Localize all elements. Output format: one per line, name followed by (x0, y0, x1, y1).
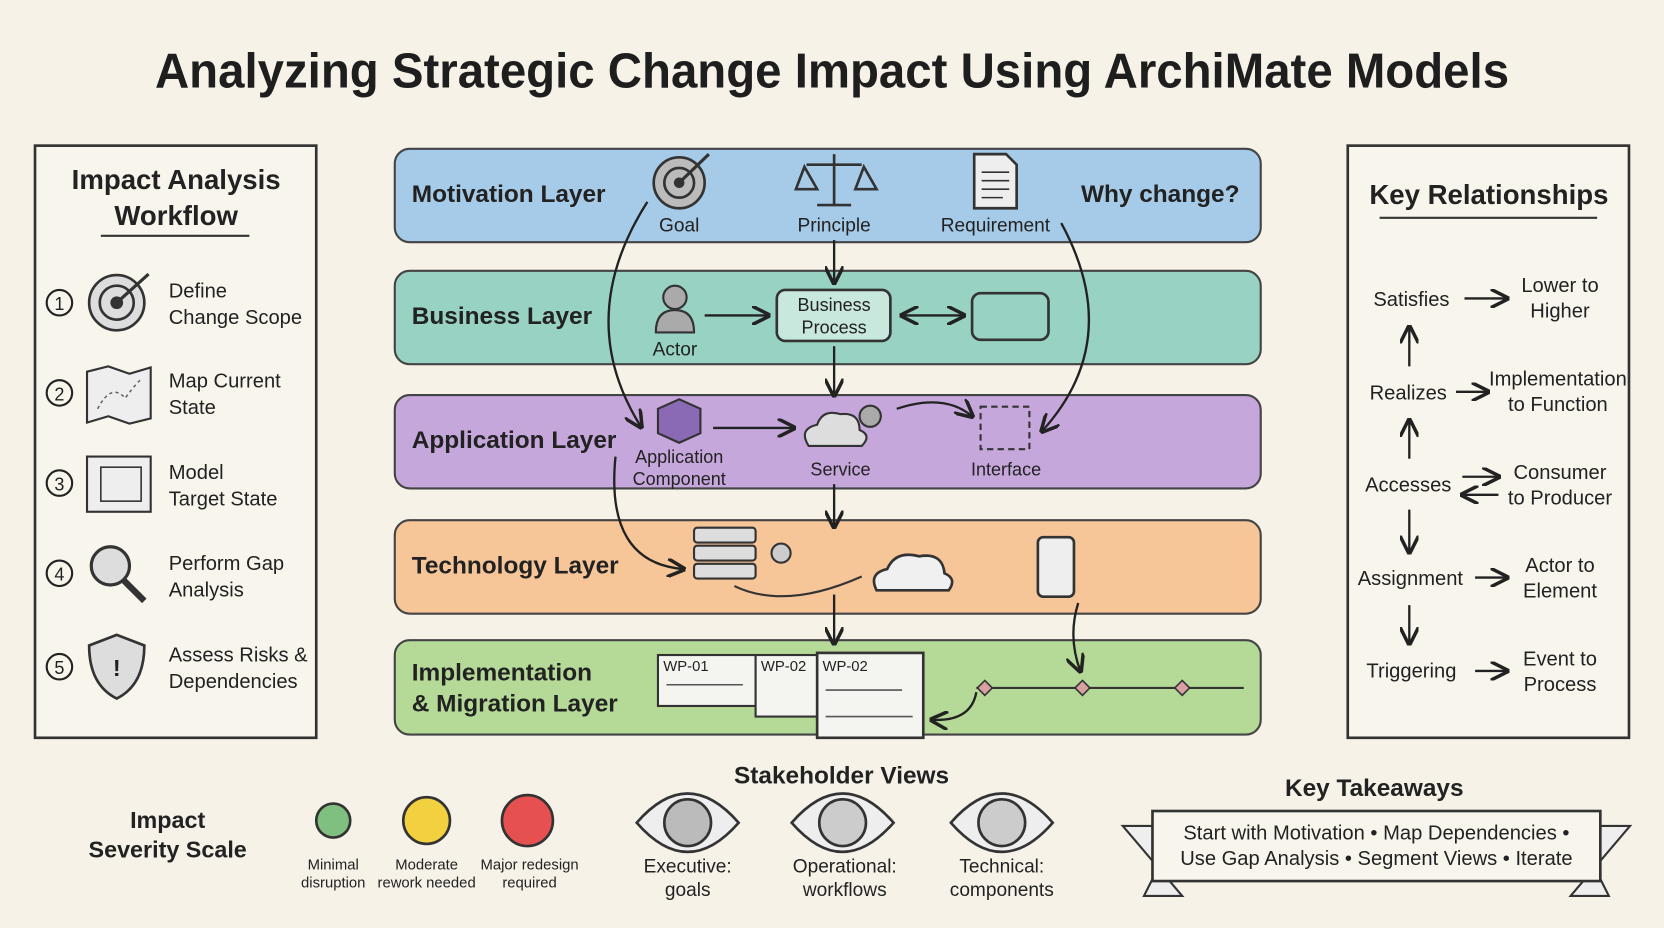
step 3: Target State (169, 488, 277, 510)
layer: motivation: Requirement (941, 216, 1051, 237)
impact severity scale: Severity Scale (89, 837, 247, 863)
step 2 (47, 366, 281, 424)
panel: key relationships: Higher (1530, 301, 1590, 323)
stakeholder views: goals (665, 880, 711, 901)
step 1: Change Scope (169, 307, 302, 329)
panel: key relationships: Realizes (1370, 382, 1447, 404)
impact severity scale: rework needed (378, 875, 476, 891)
panel: key relationships: Actor to (1525, 555, 1595, 577)
step 4 (47, 547, 284, 602)
layer: motivation: Why change? (1081, 181, 1240, 208)
stakeholder views: Stakeholder Views (734, 762, 949, 789)
layer: implementation: Implementation (412, 659, 592, 686)
step 1 (47, 274, 302, 330)
impact severity scale: disruption (301, 875, 365, 891)
key takeaways: Key Takeaways (1285, 775, 1464, 802)
impact severity scale: required (502, 875, 557, 891)
panel: impact analysis workflow: Workflow (114, 200, 239, 231)
stakeholder views (637, 762, 1054, 901)
step 3: 3 (54, 475, 64, 495)
panel: key relationships: Element (1523, 581, 1597, 603)
panel: key relationships: Implementation (1489, 368, 1627, 390)
layer: application: Application Layer (412, 427, 617, 454)
step 1: 1 (54, 294, 64, 314)
panel: key relationships: to Producer (1508, 487, 1612, 509)
impact severity scale: Impact (130, 807, 205, 833)
layer: technology: Technology Layer (412, 552, 619, 579)
step 1: Define (169, 280, 227, 302)
layers (395, 149, 1261, 738)
panel: key relationships: Assignment (1358, 568, 1463, 590)
impact severity scale (89, 795, 579, 891)
layer: application: Component (633, 469, 726, 489)
step 5: 5 (54, 658, 64, 678)
step 5 (47, 635, 308, 699)
layer: application: Service (810, 460, 871, 480)
step 3 (47, 457, 277, 512)
layer: application: Application (635, 447, 723, 467)
panel: key relationships: Process (1524, 674, 1596, 696)
heading: workflow: Impact Analysis (72, 164, 281, 195)
layer: implementation: & Migration Layer (412, 690, 618, 717)
layer: business: Actor (653, 340, 698, 361)
layer: implementation: WP-02 (761, 659, 806, 675)
layer: business: Process (802, 317, 867, 337)
layer: business: Business Layer (412, 303, 593, 330)
panel: key relationships (1348, 146, 1629, 738)
panel: key relationships: Event to (1523, 649, 1597, 671)
impact severity scale: Moderate (395, 857, 458, 873)
impact severity scale: Minimal (308, 857, 359, 873)
stakeholder views: Operational: (793, 857, 897, 878)
arrows between layers (609, 202, 1089, 720)
key takeaways (1123, 775, 1630, 896)
layer: motivation (395, 149, 1261, 242)
layer: implementation: WP-01 (663, 659, 709, 675)
step 5: ! (113, 655, 121, 681)
step 5: Dependencies (169, 671, 298, 693)
step 3: Model (169, 462, 224, 484)
step 2: State (169, 397, 216, 419)
layer: motivation: Principle (798, 216, 871, 237)
layer: motivation: Goal (659, 216, 699, 237)
panel: key relationships: Consumer (1514, 462, 1607, 484)
key takeaways: Use Gap Analysis • Segment Views • Iterate (1180, 848, 1573, 870)
layer: business: Business (798, 295, 871, 315)
layer: technology (395, 520, 1261, 614)
layer: application: Interface (971, 460, 1041, 480)
step 4: Perform Gap (169, 553, 284, 575)
layer: application (395, 395, 1261, 489)
step 5: Assess Risks & (169, 644, 308, 666)
step 2: Map Current (169, 371, 281, 393)
panel: key relationships: Satisfies (1373, 289, 1450, 311)
panel: key relationships: Key Relationships (1369, 179, 1608, 210)
layer: implementation: WP-02 (822, 659, 868, 675)
layer: motivation: Motivation Layer (412, 181, 606, 208)
stakeholder views: components (950, 880, 1054, 901)
key takeaways: Start with Motivation • Map Dependencies • (1183, 823, 1569, 845)
step 4: Analysis (169, 580, 244, 602)
impact severity scale: Major redesign (480, 857, 579, 873)
panel: key relationships: to Function (1508, 394, 1608, 416)
panel: key relationships: Lower to (1521, 275, 1599, 297)
stakeholder views: Technical: (959, 857, 1044, 878)
layer: implementation (395, 640, 1261, 738)
title: Analyzing Strategic Change Impact Using ArchiMate Models (155, 44, 1509, 98)
stakeholder views: workflows (802, 880, 887, 901)
step 2: 2 (54, 384, 64, 404)
panel: impact analysis workflow (35, 146, 316, 738)
panel: key relationships: Accesses (1365, 475, 1451, 497)
step 4: 4 (54, 565, 64, 585)
panel: key relationships: Triggering (1366, 660, 1456, 682)
layer: business (395, 271, 1261, 364)
stakeholder views: Executive: (644, 857, 732, 878)
